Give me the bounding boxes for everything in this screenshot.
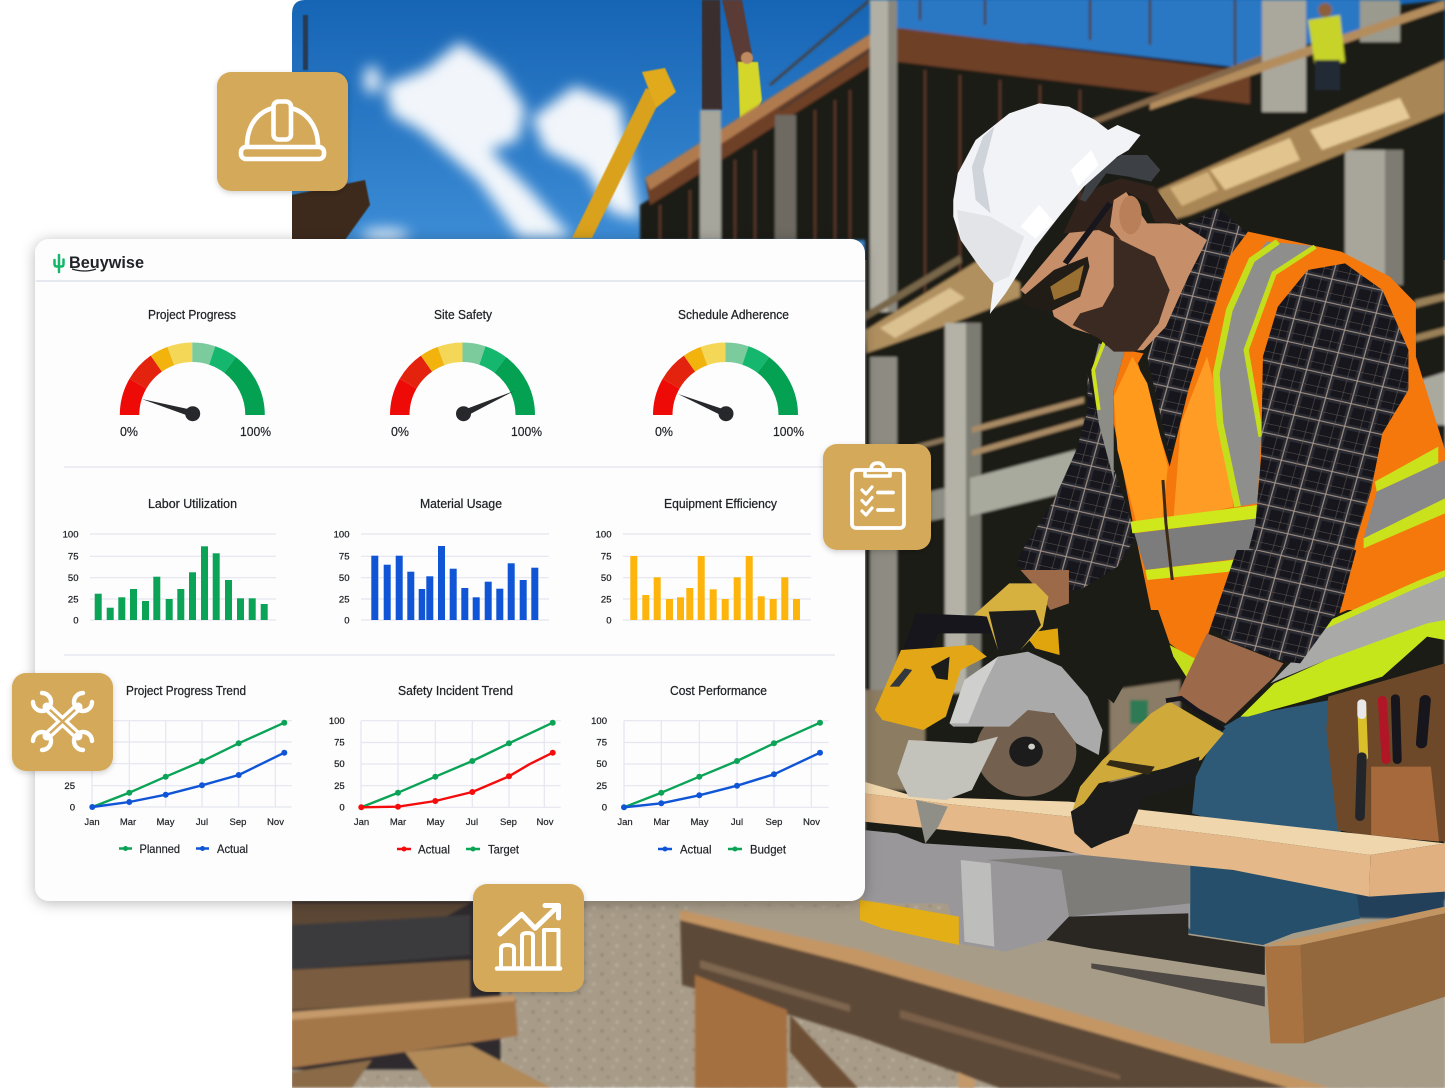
line chart: cost performance: [591, 684, 829, 856]
line chart: cost performance: 0: [602, 802, 607, 814]
line chart: cost performance: 25: [596, 781, 607, 792]
saw rear housing: [1048, 630, 1124, 704]
ground and timber stacks: [291, 880, 1445, 1088]
line chart: project progress trend: Nov: [267, 817, 284, 828]
gauge: project progress: Project Progress: [148, 308, 236, 322]
line chart: safety incident trend: 0: [339, 802, 345, 814]
line chart: safety incident trend: [329, 684, 561, 856]
bar chart: equipment efficiency: [596, 497, 811, 626]
gauge: schedule adherence: 0%: [655, 424, 673, 439]
line chart: safety incident trend: Safety Incident Trend: [398, 684, 513, 698]
line chart: safety incident trend: Actual: [418, 842, 450, 856]
left forearm: [1020, 570, 1069, 610]
line chart: project progress trend: Sep: [230, 817, 246, 828]
line chart: safety incident trend: Nov: [537, 817, 554, 828]
beard: [1073, 237, 1170, 352]
line chart: cost performance: Sep: [766, 817, 782, 828]
bar chart: equipment efficiency: 25: [601, 594, 612, 606]
distant crane and scaffold: [291, 0, 762, 240]
sky: [291, 0, 1445, 260]
bar chart: labor utilization: 25: [68, 594, 78, 606]
bar chart: labor utilization: 0: [73, 616, 78, 626]
bar chart: labor utilization: [63, 497, 276, 626]
clouds: [361, 42, 640, 241]
gauge: schedule adherence: 100%: [773, 424, 804, 439]
line chart: cost performance: Cost Performance: [670, 684, 767, 698]
icon: crossed wrenches tile: [12, 673, 113, 771]
line chart: safety incident trend: 75: [334, 738, 345, 748]
bar chart: labor utilization: 50: [68, 573, 78, 584]
vest horizontal reflective bands: [1130, 505, 1257, 533]
rolled sleeve: [1211, 550, 1356, 663]
line chart: safety incident trend: 50: [334, 759, 345, 770]
white hard hat: [953, 103, 1141, 314]
gauge: schedule adherence: [653, 308, 804, 439]
line chart: project progress trend: Project Progress Trend: [126, 684, 246, 698]
hair: [1063, 178, 1181, 240]
bar chart: equipment efficiency: 100: [596, 530, 612, 540]
vest shoulder reflective strap: [1214, 242, 1315, 507]
line chart: cost performance: May: [691, 817, 709, 828]
bar chart: material usage: 100: [334, 530, 350, 540]
line chart: safety incident trend: Mar: [390, 817, 406, 828]
gauge: site safety: Site Safety: [434, 308, 493, 322]
bar chart: equipment efficiency: Equipment Efficiency: [664, 497, 778, 511]
line chart: project progress trend: Actual: [217, 842, 248, 856]
line chart: project progress trend: Jan: [84, 817, 100, 828]
icon: growth chart tile: [473, 884, 584, 992]
tools in pouch: [1360, 698, 1425, 817]
workbench table: [680, 905, 1445, 1088]
construction site photo scene: [291, 0, 1445, 1088]
left glove: [974, 583, 1048, 650]
line chart: cost performance: 100: [591, 716, 607, 727]
line chart: safety incident trend: May: [427, 817, 445, 828]
neck and face: [1020, 190, 1207, 352]
bar chart: material usage: 25: [339, 594, 350, 606]
line chart: project progress trend: 0: [70, 802, 75, 814]
line chart: cost performance: 75: [596, 738, 607, 748]
ear: [1119, 196, 1142, 234]
line chart: cost performance: 50: [596, 759, 607, 770]
line chart: project progress trend: Jul: [196, 817, 208, 828]
line chart: safety incident trend: Jan: [354, 817, 369, 828]
bar chart: material usage: 0: [344, 616, 350, 626]
header logo: Beuywise: [69, 253, 144, 272]
vest left gray strap: [1091, 343, 1125, 480]
lumber block: [1265, 945, 1304, 1043]
gauge: project progress: [120, 308, 271, 439]
icon: hard hat tile: [217, 72, 348, 191]
line chart: cost performance: Jan: [617, 817, 633, 828]
line chart: project progress trend: May: [157, 817, 175, 828]
metal plate on table: [1091, 963, 1265, 1007]
line chart: project progress trend: 25: [64, 781, 75, 792]
bar chart: material usage: 50: [339, 573, 350, 584]
bar chart: labor utilization: 100: [63, 530, 78, 540]
panel: dashboard card: [35, 239, 865, 901]
shirt torso: [1147, 208, 1246, 457]
tool belt pouch: [1326, 663, 1445, 842]
miter saw stand: [864, 830, 1190, 952]
building structure: [640, 0, 1445, 900]
lumber beam: [864, 793, 1370, 897]
worker lower body, saw and lumber: [860, 550, 1445, 1043]
line chart: project progress trend: 100: [59, 716, 75, 727]
bar chart: material usage: [334, 497, 549, 626]
right forearm: [1177, 633, 1283, 723]
gauge: project progress: 0%: [120, 424, 138, 439]
line chart: cost performance: Jul: [731, 817, 743, 828]
jeans: [1192, 700, 1341, 837]
helmet suspension band: [1080, 155, 1160, 202]
sunglasses: [1020, 257, 1089, 312]
bar chart: equipment efficiency: 75: [601, 552, 612, 562]
gauge: project progress: 100%: [240, 424, 271, 439]
bar chart: equipment efficiency: 0: [606, 616, 612, 626]
worker upper body: [953, 103, 1445, 610]
gauge: site safety: 0%: [391, 424, 409, 439]
bar chart: material usage: Material Usage: [420, 497, 502, 511]
bar chart: material usage: 75: [339, 552, 350, 562]
right glove: [1073, 702, 1224, 810]
line chart: cost performance: Nov: [803, 817, 820, 828]
line chart: safety incident trend: Sep: [500, 817, 517, 828]
saw blade guard: [950, 652, 1103, 755]
saw blade: [976, 707, 1076, 797]
line chart: safety incident trend: Jul: [466, 817, 478, 828]
line chart: safety incident trend: 100: [329, 716, 345, 727]
line chart: project progress trend: Mar: [120, 817, 136, 828]
gauge: schedule adherence: Schedule Adherence: [678, 308, 789, 322]
bar chart: equipment efficiency: 50: [601, 573, 612, 584]
vest lower panel: [1153, 580, 1244, 665]
line chart: safety incident trend: 25: [334, 781, 345, 792]
line chart: cost performance: Actual: [680, 842, 712, 856]
line chart: project progress trend: [59, 684, 292, 856]
line chart: cost performance: Budget: [750, 842, 787, 856]
left arm plaid sleeve: [1017, 373, 1136, 590]
bar chart: labor utilization: 75: [68, 552, 78, 562]
line chart: project progress trend: Planned: [140, 842, 180, 856]
line chart: project progress trend: 75: [64, 738, 75, 748]
icon: clipboard checklist tile: [823, 444, 931, 550]
safety vest: [1114, 232, 1445, 610]
right arm plaid sleeve: [1233, 263, 1408, 610]
gauge: site safety: 100%: [511, 424, 542, 439]
vest zipper: [1163, 480, 1173, 590]
saw base casting: [897, 737, 998, 800]
saw handle: [905, 614, 992, 650]
shadow under stand: [1047, 913, 1265, 975]
line chart: safety incident trend: Target: [488, 842, 520, 856]
gauge: site safety: [390, 308, 542, 439]
line chart: cost performance: Mar: [653, 817, 670, 828]
line chart: project progress trend: 50: [64, 759, 75, 770]
bar chart: labor utilization: Labor Utilization: [148, 497, 237, 511]
saw yellow body: [875, 645, 987, 730]
